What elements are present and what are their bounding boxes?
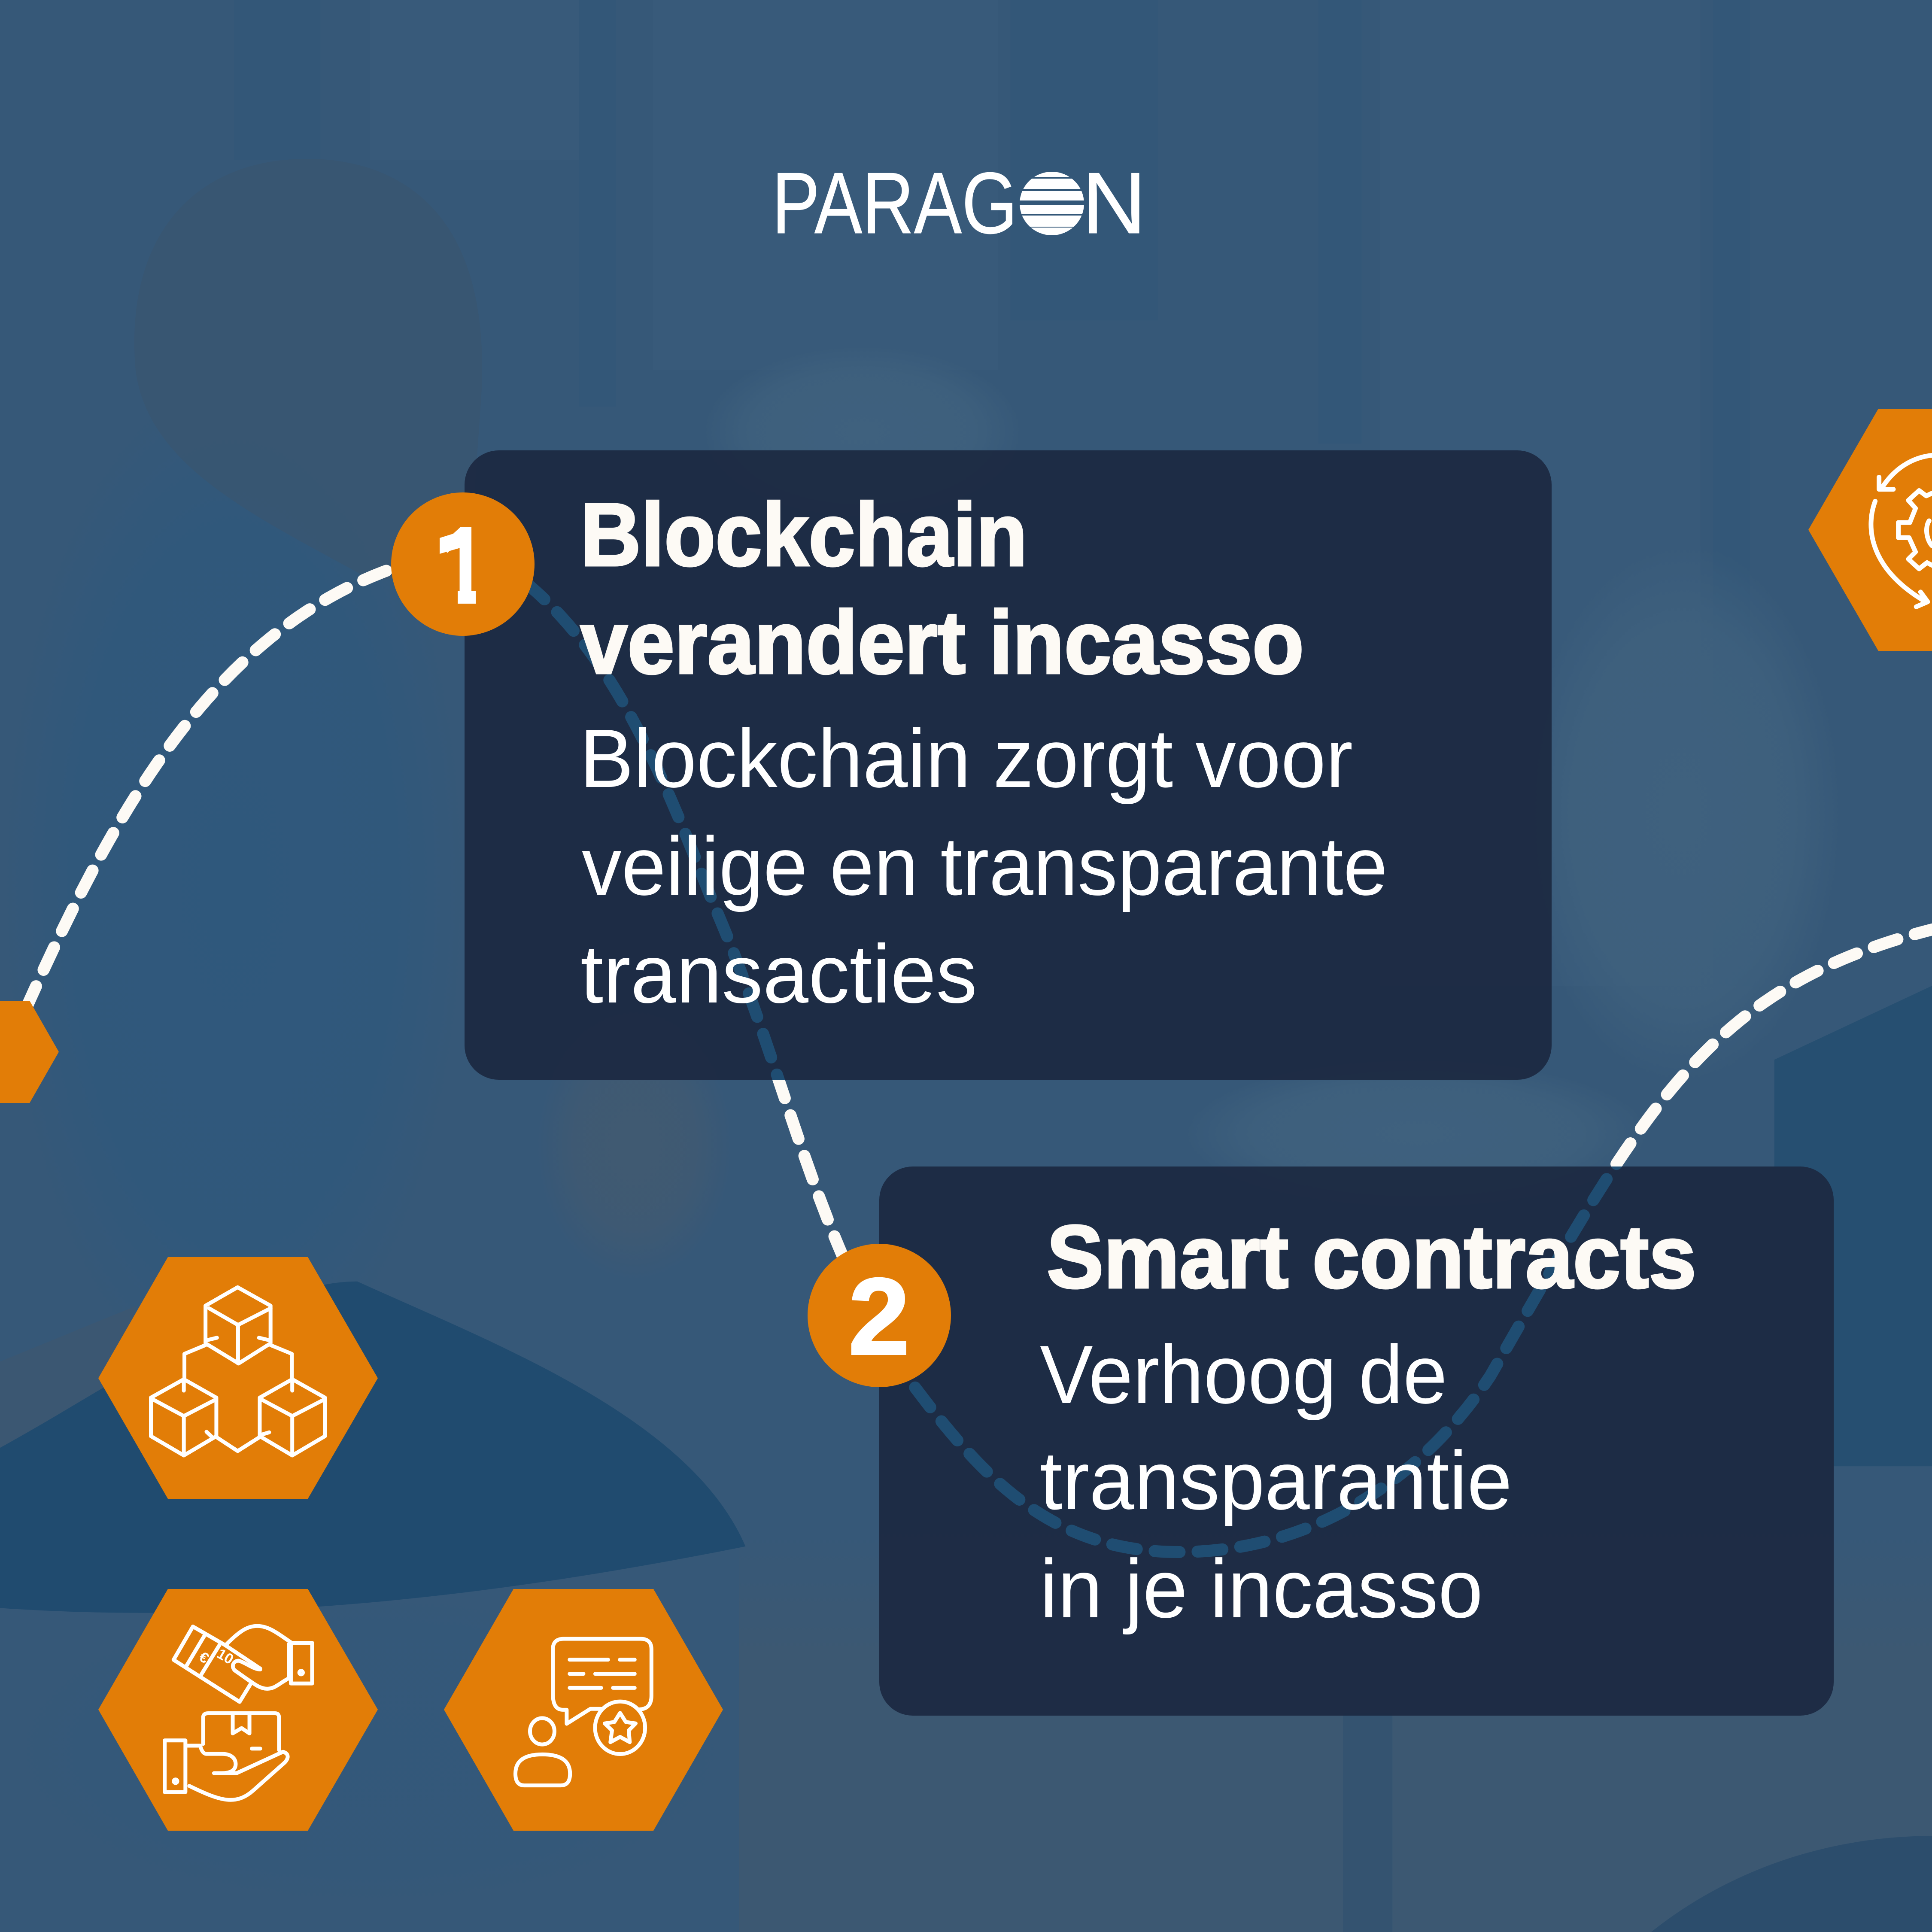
body text: in je incasso xyxy=(1040,1542,1483,1635)
text: smart contracts card xyxy=(1040,1207,1696,1635)
number badge 2 xyxy=(808,1244,951,1387)
panel: smart contracts card xyxy=(879,1166,1834,1716)
logo wordmark: PARAG xyxy=(772,155,1018,252)
number badge 1: 1 xyxy=(442,504,485,626)
logo: Paragon xyxy=(778,172,1139,235)
icon: hand with banknote and hand with parcel xyxy=(165,1626,312,1800)
logo globe xyxy=(1018,172,1086,235)
heading: verandert incasso xyxy=(580,593,1304,693)
body text: Blockchain zorgt voor xyxy=(580,712,1353,805)
body text: Verhoog de xyxy=(1040,1328,1447,1421)
dashed route line xyxy=(26,557,1932,1552)
banknote value: 10 xyxy=(214,1646,236,1668)
logo wordmark: N xyxy=(1082,155,1146,252)
hexagon icon: money and parcel exchange xyxy=(98,1589,378,1831)
panel: blockchain card xyxy=(465,450,1552,1080)
body text: veilige en transparante xyxy=(582,820,1388,912)
number badge 1 xyxy=(391,492,535,636)
heading: Blockchain xyxy=(580,485,1027,585)
icon: gear xyxy=(1871,455,1932,607)
body text: transacties xyxy=(580,927,977,1020)
hexagon icon: customer review xyxy=(444,1589,723,1831)
heading: Smart contracts xyxy=(1047,1207,1696,1307)
hexagon icon: gear with rotating arrows xyxy=(1808,409,1932,651)
dashed route line inside the cards xyxy=(529,580,1622,1558)
hexagon icon: blockchain cubes xyxy=(98,1257,378,1499)
banknote currency: € xyxy=(196,1649,212,1667)
hexagon: left edge xyxy=(0,1001,59,1103)
number badge 2: 2 xyxy=(848,1255,910,1377)
icon: person, speech bubble and star xyxy=(516,1639,651,1786)
text: blockchain card xyxy=(580,485,1388,1020)
body text: transparantie xyxy=(1040,1434,1512,1527)
icon: cubes xyxy=(151,1287,325,1455)
